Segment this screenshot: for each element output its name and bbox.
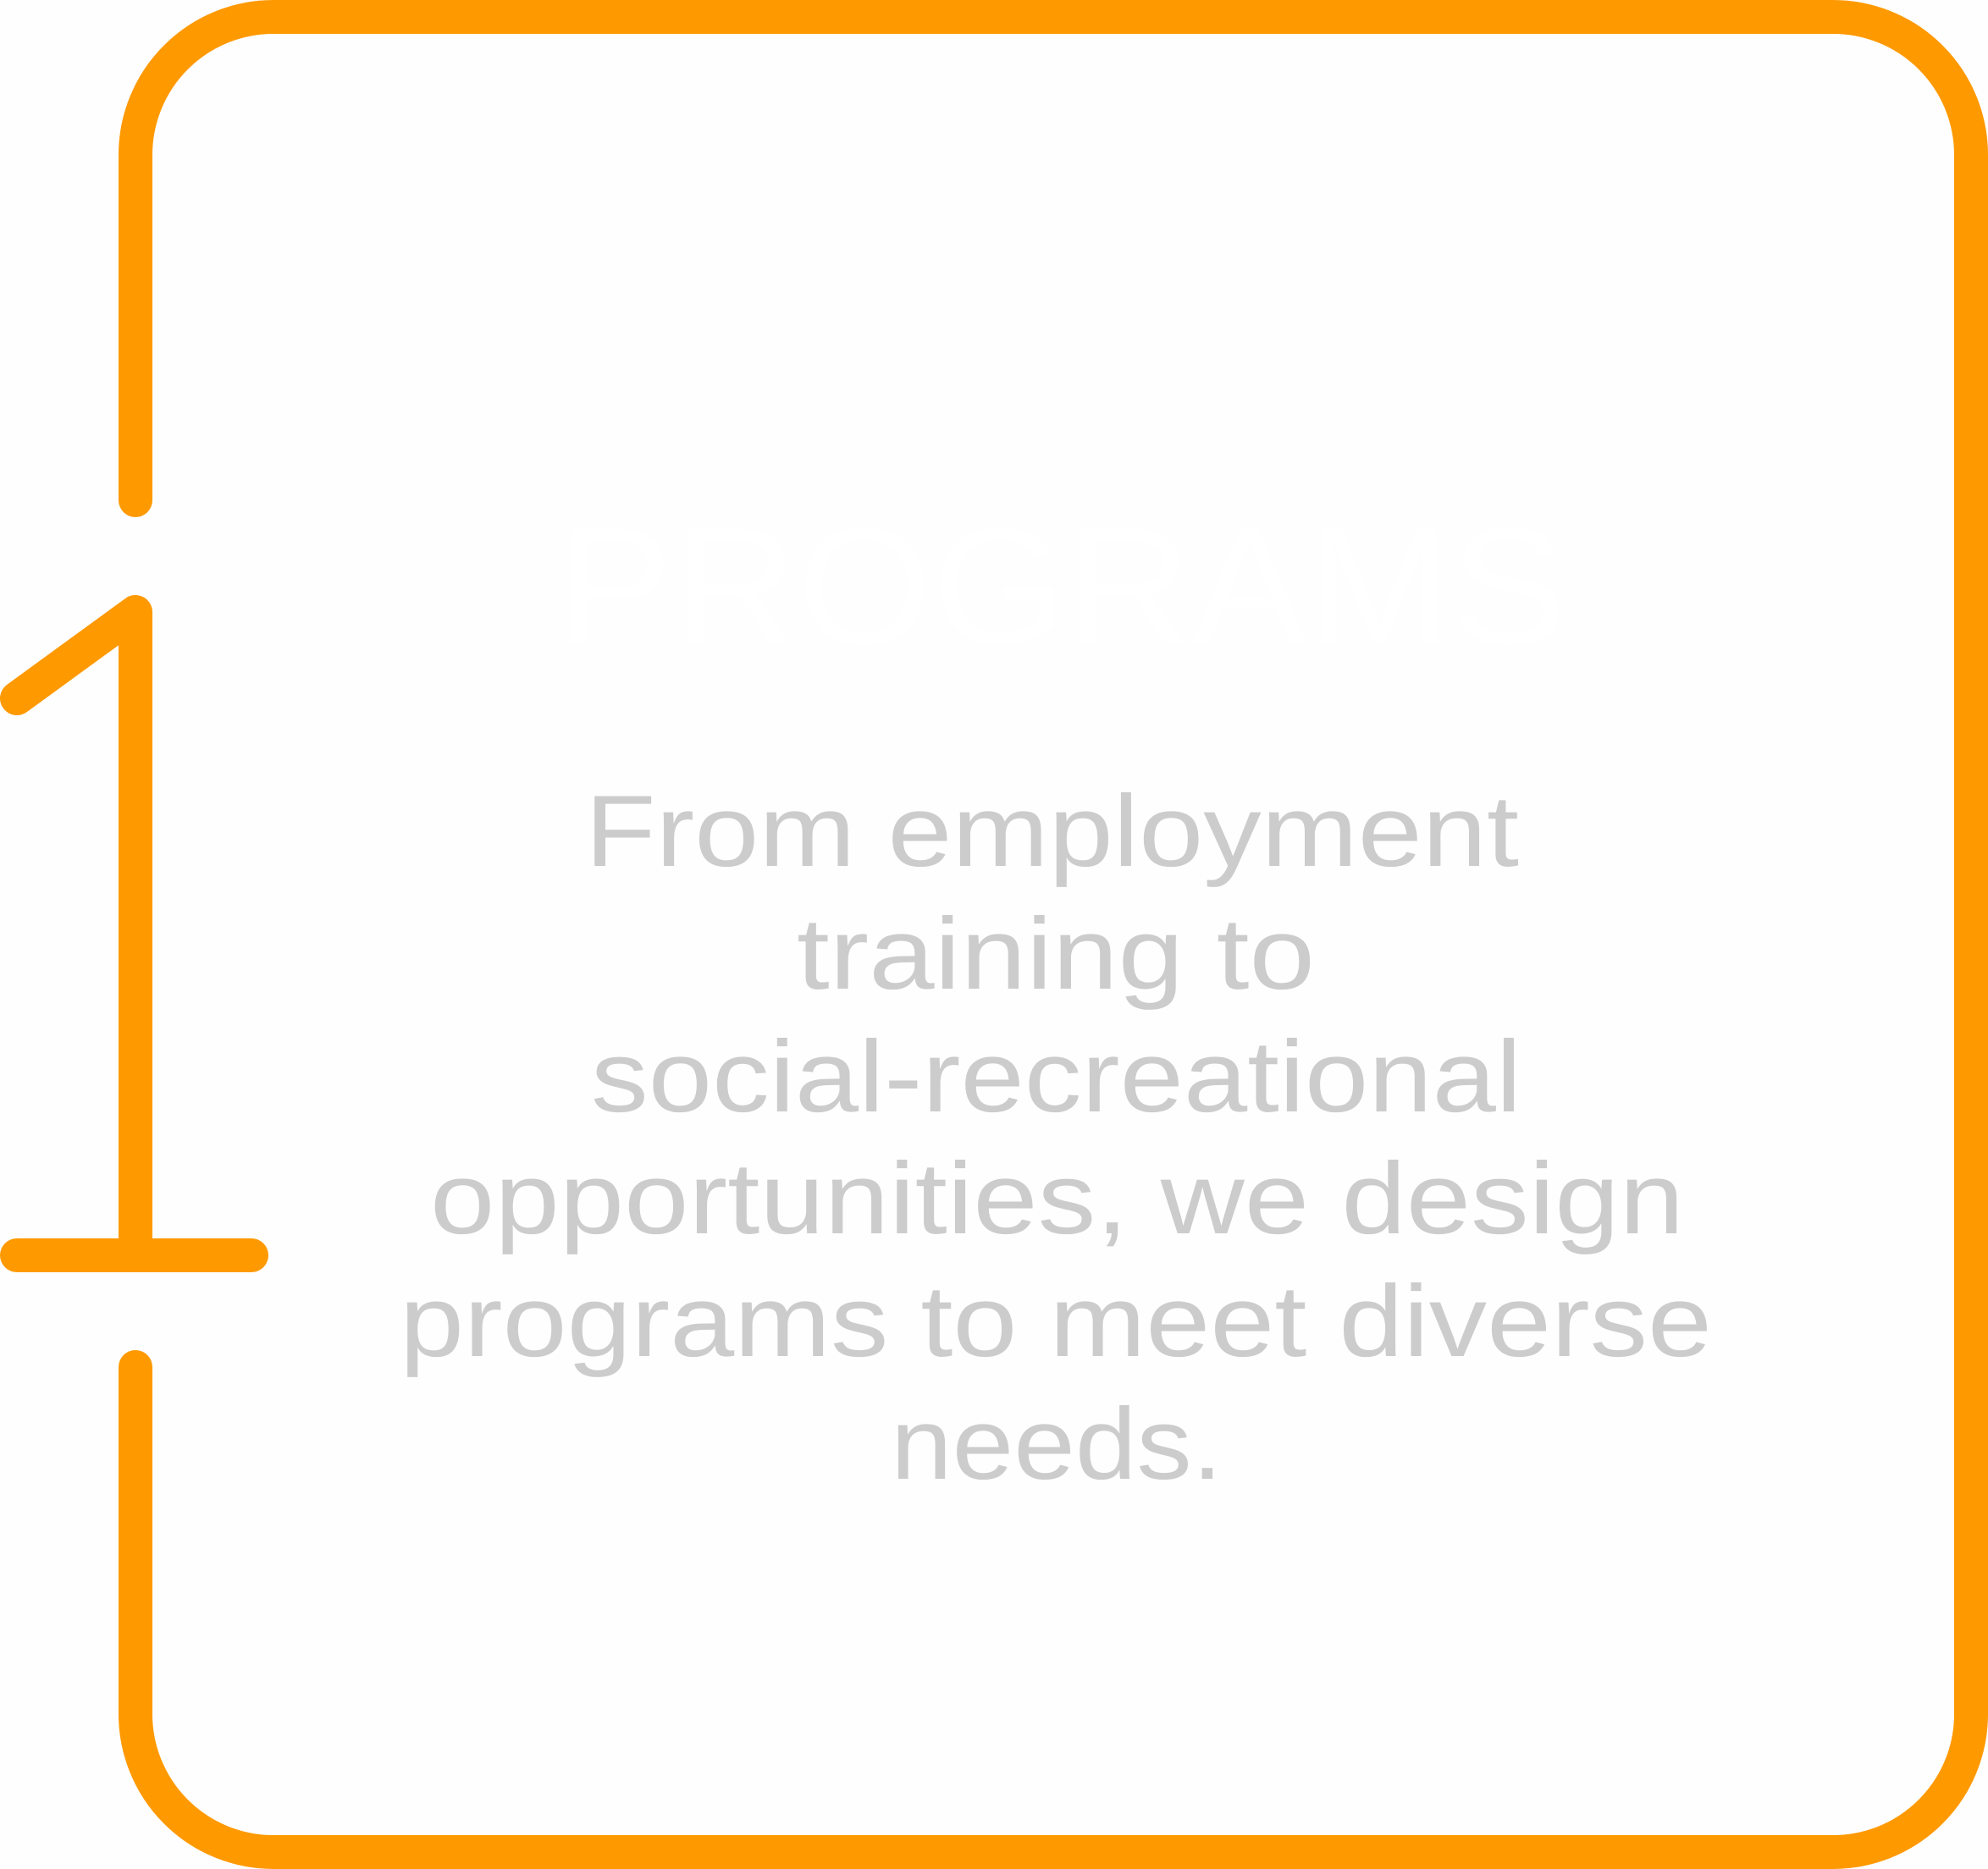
body text block: social-recreational [591,1020,1521,1133]
body text block: opportunities, we design [430,1142,1684,1255]
body text block: programs to meet diverse [400,1265,1712,1378]
heading: white on white: PROGRAMS [557,493,1566,679]
numeral 1 drawn in orange strokes [17,612,251,1255]
body text block [400,775,1712,1501]
body text block: needs. [891,1387,1223,1501]
body text block: training to [797,897,1315,1011]
body text block: From employment [585,775,1519,888]
